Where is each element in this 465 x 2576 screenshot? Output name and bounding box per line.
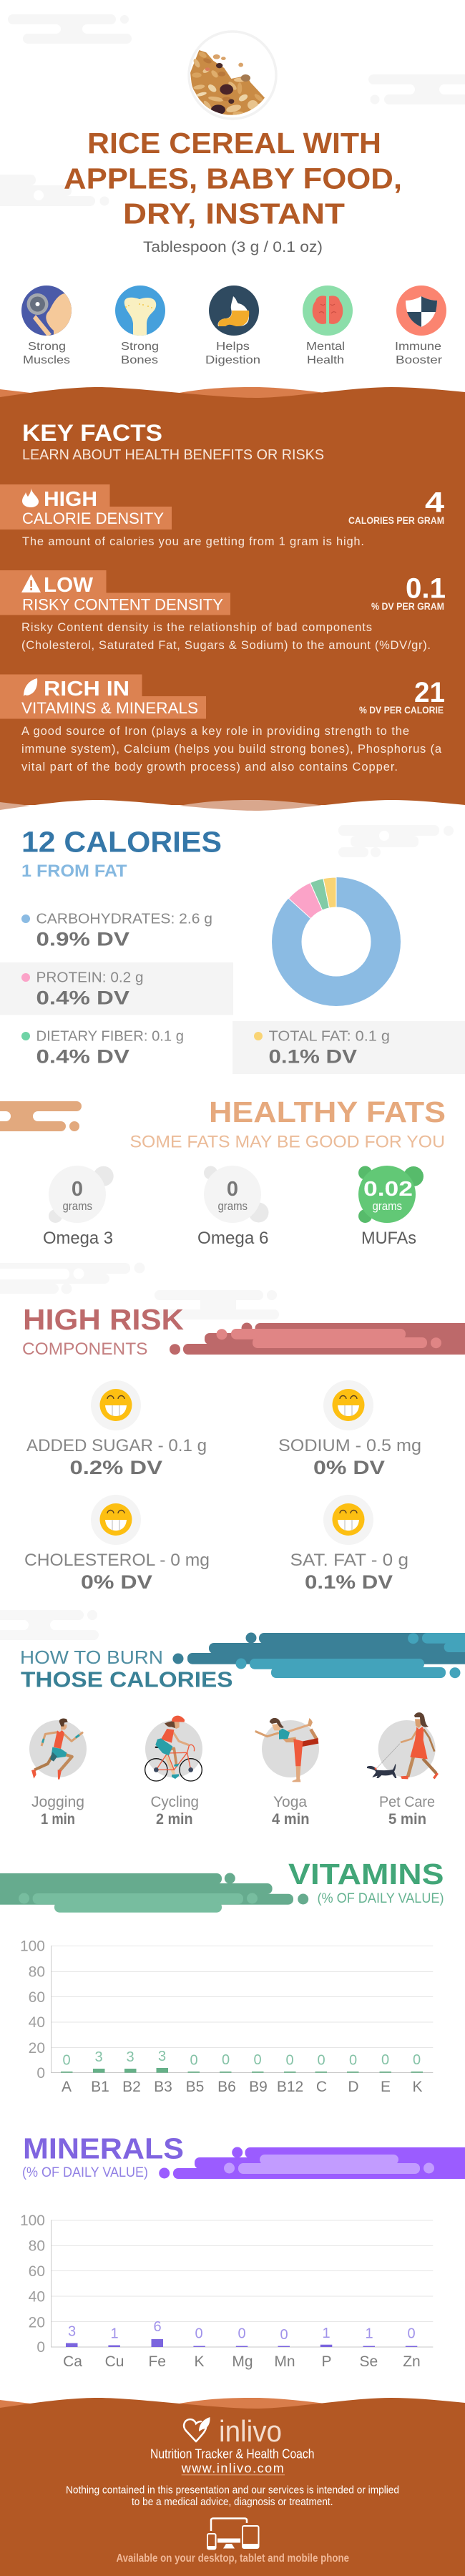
- fact: rich in vitamins and minerals: immune system), Calcium (helps you build strong bones), Phosphorus (a: [21, 743, 442, 756]
- fact: high calorie density: The amount of calories you are getting from 1 gram is high.: [22, 535, 364, 548]
- panel: how to burn those calories: [20, 1633, 465, 1828]
- bar chart: vitamins: 0: [413, 2052, 421, 2068]
- legend: protein: 0.4% DV: [36, 987, 129, 1009]
- panel: high risk: [22, 1303, 465, 1593]
- bar chart: vitamins: 0: [36, 2065, 45, 2082]
- heading: high risk: COMPONENTS: [22, 1340, 147, 1359]
- bar chart: vitamins: 0: [253, 2052, 262, 2068]
- bar chart: minerals: 60: [29, 2263, 45, 2280]
- heading: 12 calories: [21, 826, 222, 881]
- text: helps digestion: [205, 341, 260, 366]
- heading: 12 calories: 12 CALORIES: [21, 826, 222, 859]
- food photo: granola in a circle: [189, 31, 276, 119]
- logo: inlivo: inlivo: [219, 2414, 282, 2448]
- text: mental health: [306, 341, 345, 366]
- calories background cloud: [338, 825, 454, 857]
- high risk background clouds: [0, 1262, 279, 1319]
- legend: total fat: 0.1% DV: [269, 1046, 357, 1068]
- icon: strong bones: [115, 286, 165, 338]
- bar chart: vitamins: 3: [126, 2049, 134, 2065]
- bar chart: minerals: 0: [195, 2326, 203, 2341]
- fact: low risky content density: 0.1: [406, 572, 446, 604]
- item: cholesterol: 0% DV: [81, 1571, 152, 1593]
- bar chart: vitamins: E: [381, 2079, 391, 2095]
- text: immune booster: Immune: [395, 341, 441, 353]
- activity: yoga: 4 min: [272, 1811, 309, 1828]
- bar chart: minerals: [20, 2212, 433, 2370]
- icon: flame: [22, 488, 39, 507]
- title: RICE CEREAL WITH: [87, 127, 381, 160]
- item: sodium: [278, 1380, 421, 1478]
- icon: helps digestion: [209, 286, 259, 336]
- bar chart: vitamins: 20: [29, 2040, 45, 2057]
- fact: rich in vitamins and minerals: [0, 674, 445, 774]
- logo: inlivo: [184, 2414, 282, 2448]
- legend: dietary fiber: DIETARY FIBER: 0.1 g: [36, 1029, 184, 1045]
- legend: carbohydrates: [21, 912, 212, 950]
- fact: high calorie density: CALORIES PER GRAM: [348, 515, 444, 526]
- serving size: Tablespoon (3 g / 0.1 oz): [143, 239, 323, 255]
- item: sodium: 0% DV: [313, 1457, 385, 1478]
- item: saturated fat: [290, 1495, 408, 1593]
- text: strong bones: Bones: [121, 354, 158, 366]
- bar chart: vitamins: D: [348, 2079, 359, 2095]
- text: strong bones: Strong: [121, 341, 159, 353]
- panel: vitamins: [0, 1858, 444, 2095]
- bar chart: minerals: 20: [29, 2314, 45, 2331]
- item: added sugar: ADDED SUGAR - 0.1 g: [26, 1436, 207, 1455]
- bar chart: vitamins: A: [62, 2079, 72, 2095]
- fact: low risky content density: (Cholesterol, Saturated Fat, Sugars & Sodium) to the amount (%DV/gr).: [21, 639, 431, 652]
- bubble: omega 6: Omega 6: [197, 1229, 269, 1248]
- panel: calories: [0, 826, 465, 1074]
- bubble: omega 3: [43, 1166, 114, 1248]
- panel: minerals: [20, 2132, 465, 2370]
- bar chart: minerals: Zn: [403, 2353, 421, 2370]
- bar chart: minerals: Mn: [274, 2353, 295, 2370]
- bar chart: minerals: P: [321, 2353, 332, 2370]
- text: mental health: Health: [307, 354, 344, 366]
- bar chart: vitamins: [20, 1938, 433, 2095]
- activity: pet care: [367, 1712, 439, 1828]
- item: cholesterol: [24, 1495, 210, 1593]
- bar chart: vitamins: 0: [62, 2052, 71, 2068]
- bar chart: vitamins: 0: [317, 2052, 326, 2068]
- bar chart: minerals: Ca: [63, 2353, 82, 2370]
- disclaimer: to be a medical advice, diagnosis or treatment.: [132, 2496, 333, 2508]
- bubble: omega 3: Omega 3: [43, 1229, 113, 1248]
- bar chart: minerals: Fe: [148, 2353, 166, 2370]
- heading: high risk: [22, 1303, 184, 1359]
- bar chart: minerals: 0: [280, 2327, 288, 2343]
- legend: dietary fiber: [21, 1029, 184, 1068]
- fact: rich in vitamins and minerals: % DV PER CALORIE: [359, 705, 444, 716]
- bar chart: minerals: 0: [238, 2326, 246, 2341]
- burn calories background cloud: [0, 1610, 100, 1640]
- bar chart: vitamins: 0: [190, 2052, 198, 2068]
- activity: yoga: Yoga: [273, 1794, 307, 1810]
- bar chart: vitamins: 0: [285, 2052, 294, 2068]
- heading: key facts: KEY FACTS: [22, 420, 162, 446]
- panel: healthy fats: [0, 1096, 446, 1248]
- decorative banner: [170, 1322, 465, 1355]
- bar chart: vitamins: 0: [349, 2052, 357, 2068]
- heading: key facts: LEARN ABOUT HEALTH BENEFITS OR RISKS: [22, 447, 324, 463]
- title: APPLES, BABY FOOD,: [64, 162, 402, 195]
- text: strong muscles: Strong: [28, 341, 66, 353]
- row shading: [0, 962, 465, 1074]
- icon: warning triangle: [21, 574, 41, 592]
- heading: healthy fats: SOME FATS MAY BE GOOD FOR YOU: [130, 1132, 445, 1152]
- bar chart: minerals: 1: [110, 2326, 119, 2341]
- bar chart: vitamins: B1: [91, 2079, 109, 2095]
- bubble: mufas: [358, 1166, 424, 1248]
- heading: minerals: (% OF DAILY VALUE): [22, 2165, 148, 2180]
- activity: jogging: 1 min: [41, 1811, 75, 1828]
- panel: footer: [0, 2398, 465, 2576]
- decorative banner: [0, 1101, 82, 1131]
- bar chart: minerals: 100: [20, 2212, 45, 2229]
- activity: yoga: [255, 1718, 319, 1828]
- title: [64, 127, 402, 230]
- fact: high calorie density: CALORIE DENSITY: [22, 509, 164, 527]
- bar chart: vitamins: B12: [277, 2079, 303, 2095]
- fact: low risky content density: RISKY CONTENT DENSITY: [22, 595, 223, 614]
- activity: jogging: Jogging: [31, 1794, 84, 1810]
- heading: minerals: MINERALS: [23, 2132, 184, 2165]
- legend: protein: [21, 970, 143, 1009]
- bar chart: minerals: 80: [29, 2238, 45, 2254]
- text: helps digestion: Helps: [216, 341, 250, 353]
- legend: protein: PROTEIN: 0.2 g: [36, 970, 143, 986]
- tagline and website: www.inlivo.com: [181, 2462, 284, 2476]
- fact: rich in vitamins and minerals: 21: [414, 677, 445, 708]
- heading: vitamins: (% OF DAILY VALUE): [318, 1891, 444, 1906]
- bar chart: vitamins: B5: [186, 2079, 204, 2095]
- fact: rich in vitamins and minerals: VITAMINS & MINERALS: [21, 699, 198, 717]
- activity: pet care: 5 min: [388, 1811, 426, 1828]
- bubble: mufas: grams: [372, 1199, 402, 1213]
- legend: total fat: TOTAL FAT: 0.1 g: [269, 1029, 390, 1045]
- bar chart: vitamins: 100: [20, 1938, 45, 1955]
- disclaimer: [66, 2484, 399, 2508]
- bottom wave white: [0, 800, 465, 823]
- bubble: omega 3: grams: [63, 1199, 92, 1213]
- bar chart: minerals: K: [194, 2353, 205, 2370]
- bar chart: vitamins: B9: [249, 2079, 268, 2095]
- fact: low risky content density: Risky Content density is the relationship of bad components: [21, 621, 372, 634]
- bar chart: minerals: Cu: [105, 2353, 124, 2370]
- icon: leaf: [24, 678, 37, 696]
- header background clouds: [0, 14, 465, 206]
- item: cholesterol: CHOLESTEROL - 0 mg: [24, 1551, 210, 1570]
- text: strong bones: [121, 341, 159, 366]
- heading: key facts: [22, 420, 324, 463]
- bar chart: vitamins: 3: [94, 2049, 103, 2065]
- bar chart: minerals: Mg: [232, 2353, 253, 2370]
- bar chart: minerals: 40: [29, 2288, 45, 2306]
- activity: cycling: Cycling: [150, 1794, 199, 1810]
- fact: rich in vitamins and minerals: RICH IN: [44, 678, 129, 701]
- activity: cycling: 2 min: [156, 1811, 193, 1828]
- activity: cycling: [145, 1716, 202, 1828]
- bar chart: minerals: Se: [359, 2353, 378, 2370]
- text: mental health: Mental: [306, 341, 345, 353]
- item: added sugar: 0.2% DV: [70, 1457, 162, 1478]
- heading: how to burn: THOSE CALORIES: [21, 1667, 233, 1692]
- legend: total fat: [254, 1029, 390, 1068]
- bar chart: vitamins: K: [412, 2079, 423, 2095]
- heading: 12 calories: 1 FROM FAT: [21, 862, 127, 881]
- activity: jogging: [29, 1718, 87, 1828]
- bottom wave pale: [0, 800, 465, 823]
- legend: carbohydrates: CARBOHYDRATES: 2.6 g: [36, 912, 212, 927]
- decorative banner: [173, 1633, 465, 1678]
- decorative banner: [0, 1873, 308, 1913]
- bar chart: minerals: 3: [68, 2324, 76, 2340]
- bubble: mufas: MUFAs: [361, 1229, 416, 1248]
- bar chart: vitamins: 0: [222, 2052, 230, 2068]
- icon: devices: [207, 2519, 259, 2549]
- bar chart: minerals: 1: [322, 2326, 331, 2341]
- bar chart: vitamins: 40: [29, 2014, 45, 2031]
- fact: low risky content density: LOW: [44, 574, 94, 597]
- fact: rich in vitamins and minerals: A good source of Iron (plays a key role in providing strength to the: [21, 725, 409, 738]
- panel: key facts: [0, 387, 465, 823]
- fact: high calorie density: 4: [425, 487, 445, 518]
- bar chart: minerals: 0: [407, 2326, 416, 2341]
- text: strong muscles: [23, 341, 70, 366]
- heading: how to burn: [20, 1646, 233, 1692]
- bar chart: vitamins: 80: [29, 1963, 45, 1981]
- bar chart: vitamins: 3: [158, 2049, 166, 2064]
- text: immune booster: Booster: [396, 354, 443, 366]
- bar chart: vitamins: B3: [154, 2079, 172, 2095]
- heading: vitamins: [288, 1858, 444, 1906]
- bubble: omega 3: 0: [72, 1178, 83, 1201]
- text: helps digestion: Digestion: [205, 354, 260, 366]
- bar chart: minerals: 0: [36, 2339, 45, 2356]
- bar chart: vitamins: B2: [122, 2079, 141, 2095]
- item: saturated fat: SAT. FAT - 0 g: [290, 1551, 408, 1570]
- icon: mental health: [303, 286, 353, 336]
- bar chart: minerals: 1: [365, 2326, 373, 2341]
- fact: low risky content density: [0, 570, 446, 652]
- legend: dietary fiber: 0.4% DV: [36, 1046, 129, 1068]
- bar chart: vitamins: 0: [381, 2052, 389, 2068]
- bubble: omega 6: [197, 1166, 269, 1248]
- bubble: omega 6: grams: [217, 1199, 248, 1213]
- bar chart: minerals: 6: [153, 2319, 162, 2335]
- icon: strong muscles: [21, 286, 73, 336]
- item: sodium: SODIUM - 0.5 mg: [278, 1436, 421, 1455]
- legend: carbohydrates: 0.9% DV: [36, 929, 129, 950]
- item: added sugar: [26, 1380, 207, 1478]
- disclaimer: Nothing contained in this presentation and our services is intended or implied: [66, 2484, 399, 2496]
- heading: high risk: HIGH RISK: [23, 1303, 184, 1336]
- bar chart: vitamins: C: [316, 2079, 327, 2095]
- tagline and website: [150, 2447, 315, 2476]
- bar chart: vitamins: 60: [29, 1989, 45, 2006]
- heading: how to burn: HOW TO BURN: [20, 1646, 163, 1668]
- fact: low risky content density: % DV PER GRAM: [371, 601, 444, 612]
- donut chart: [272, 877, 401, 1006]
- tagline and website: Nutrition Tracker & Health Coach: [150, 2447, 315, 2462]
- availability note: Available on your desktop, tablet and mobile phone: [116, 2552, 349, 2565]
- fact: rich in vitamins and minerals: vital part of the body growth process) and also contains Copper.: [21, 761, 398, 774]
- fact: high calorie density: HIGH: [44, 488, 97, 511]
- fact: high calorie density: [0, 484, 445, 548]
- heading: healthy fats: [130, 1096, 446, 1152]
- bubble: mufas: 0.02: [363, 1178, 413, 1201]
- heading: vitamins: VITAMINS: [288, 1858, 444, 1890]
- decorative banner: [159, 2147, 465, 2179]
- icon: immune booster: [396, 286, 446, 336]
- text: strong muscles: Muscles: [23, 354, 70, 366]
- activity: pet care: Pet Care: [379, 1794, 435, 1810]
- heading: healthy fats: HEALTHY FATS: [209, 1096, 446, 1128]
- bubble: omega 6: 0: [227, 1178, 238, 1201]
- title: DRY, INSTANT: [123, 197, 345, 230]
- heading: minerals: [22, 2132, 184, 2180]
- bar chart: vitamins: B6: [217, 2079, 236, 2095]
- text: immune booster: [395, 341, 443, 366]
- benefit icons row: [21, 286, 446, 366]
- item: saturated fat: 0.1% DV: [305, 1571, 393, 1593]
